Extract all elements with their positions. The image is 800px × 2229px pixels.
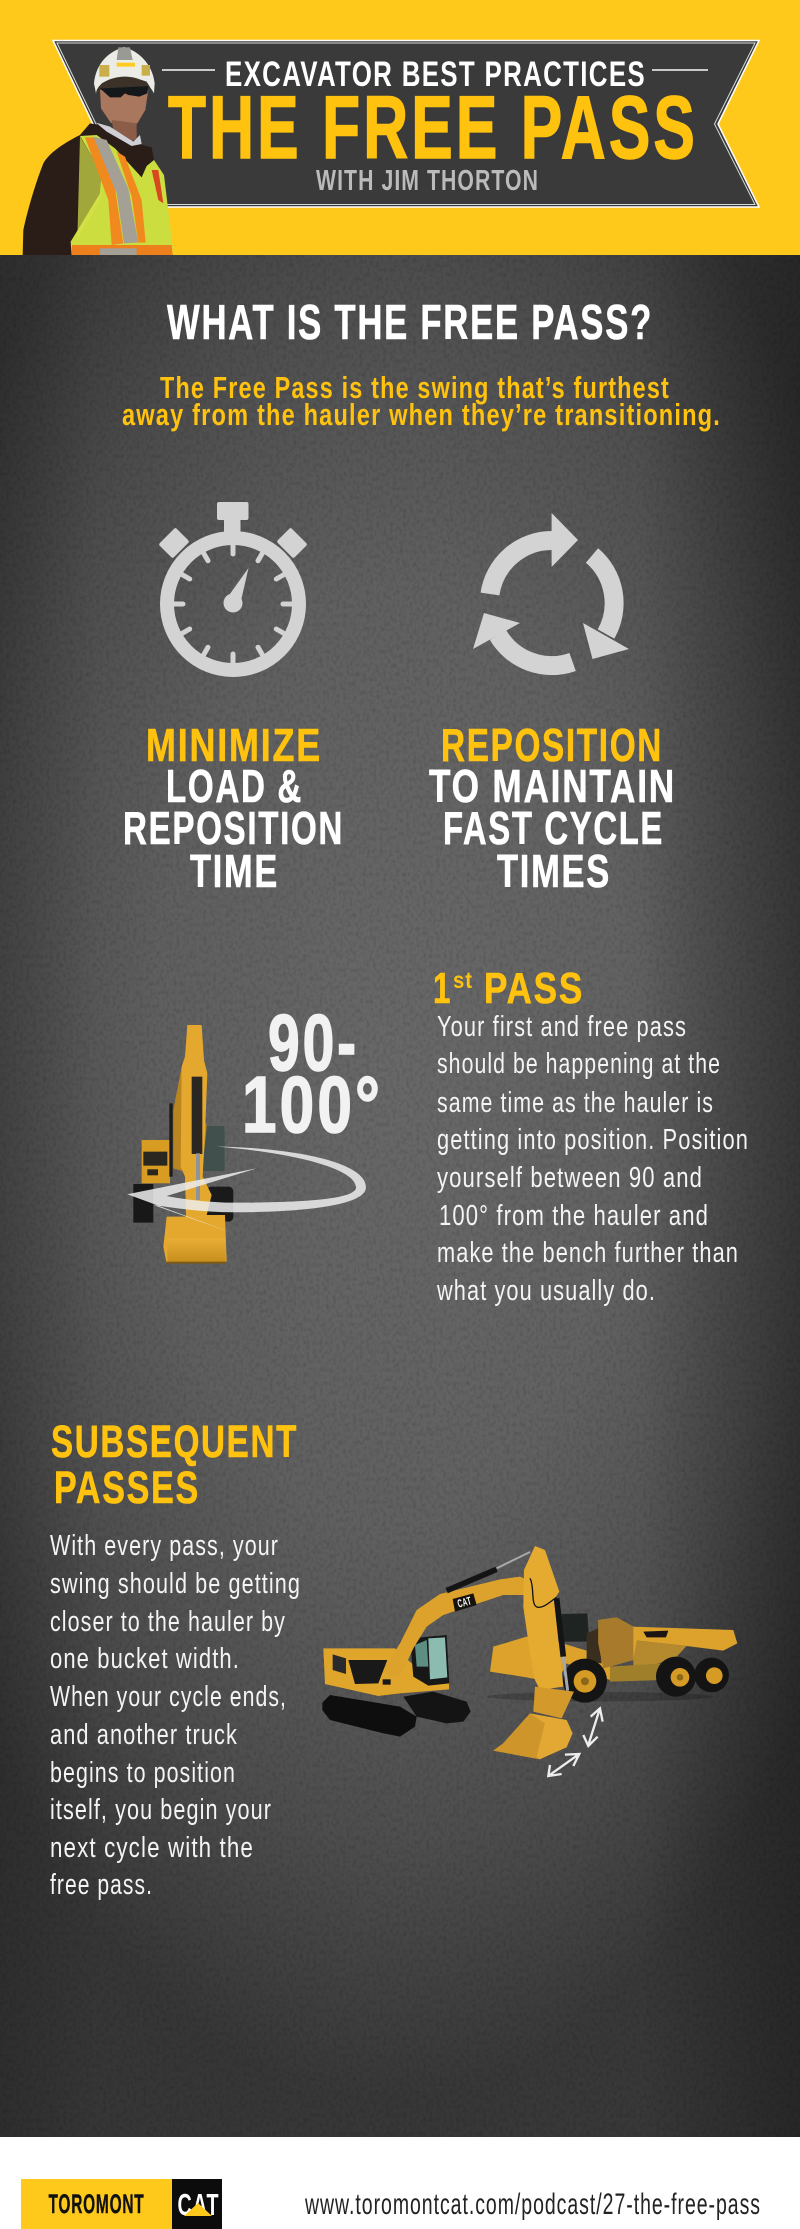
text: 1st pass body: 100° from the hauler and (439, 1200, 709, 1232)
photo: Jim Thorton (23, 47, 173, 255)
text: 1st pass body: Your first and free pass (437, 1011, 687, 1043)
text: subsequent passes body: With every pass, your (50, 1530, 279, 1562)
logo: Toromont Cat (21, 2179, 222, 2229)
heading: 1st pass (433, 964, 584, 1013)
text: 1st pass body: what you usually do. (436, 1275, 656, 1307)
header band (0, 0, 800, 255)
column: minimize: MINIMIZE (146, 719, 322, 771)
text: 1st pass body (436, 1011, 749, 1307)
text: subsequent passes body: itself, you begin your (50, 1794, 272, 1826)
footer band (0, 2137, 800, 2229)
excavator side view (322, 1546, 574, 1759)
header subtitle: with Jim Thorton: WITH JIM THORTON (316, 165, 539, 197)
arrows: bucket width markers (548, 1708, 603, 1776)
logo: Toromont Cat: TOROMONT (48, 2189, 144, 2219)
text: subsequent passes body: and another truck (50, 1719, 238, 1751)
column: minimize (123, 719, 344, 897)
column: reposition: TO MAINTAIN (429, 760, 676, 812)
excavator front view (133, 1025, 233, 1264)
heading: 1st pass: PASS (484, 964, 584, 1013)
stat: 90-100 degrees (242, 998, 383, 1149)
text: 1st pass body: yourself between 90 and (437, 1162, 703, 1194)
logo: Toromont Cat: CAT (178, 2187, 220, 2222)
stat: 90-100 degrees: 90- (268, 998, 359, 1087)
text: subsequent passes body: When your cycle ends, (50, 1681, 287, 1713)
arrow: swing (127, 1147, 366, 1233)
column: minimize: REPOSITION (123, 802, 344, 854)
text: subsequent passes body: begins to position (50, 1757, 236, 1789)
icon: stopwatch (158, 502, 308, 670)
hauler truck (487, 1613, 737, 1703)
heading: subsequent passes: PASSES (54, 1462, 200, 1513)
heading: subsequent passes (51, 1416, 298, 1513)
excavator side view: CAT (456, 1595, 473, 1611)
intro text (122, 370, 721, 432)
heading: 1st pass: st (453, 967, 473, 993)
text: subsequent passes body: swing should be getting (50, 1568, 301, 1600)
stat: 90-100 degrees: 100° (242, 1060, 383, 1149)
column: minimize: LOAD & (166, 760, 303, 812)
column: minimize: TIME (190, 845, 279, 897)
text: subsequent passes body: free pass. (50, 1869, 153, 1901)
column: reposition: REPOSITION (441, 719, 663, 771)
column: reposition: TIMES (497, 845, 611, 897)
header ribbon (53, 40, 759, 207)
text: subsequent passes body: one bucket width. (50, 1643, 240, 1675)
header kicker: excavator best practices: EXCAVATOR BEST PRACTICES (225, 55, 646, 94)
heading: subsequent passes: SUBSEQUENT (51, 1416, 298, 1467)
text: subsequent passes body (50, 1530, 301, 1901)
column: reposition (429, 719, 676, 897)
icon: reposition cycle arrows (473, 513, 629, 666)
text: subsequent passes body: closer to the hauler by (50, 1606, 286, 1638)
column: reposition: FAST CYCLE (443, 802, 664, 854)
heading: 1st pass: 1 (433, 964, 452, 1013)
text: subsequent passes body: next cycle with the (50, 1832, 254, 1864)
